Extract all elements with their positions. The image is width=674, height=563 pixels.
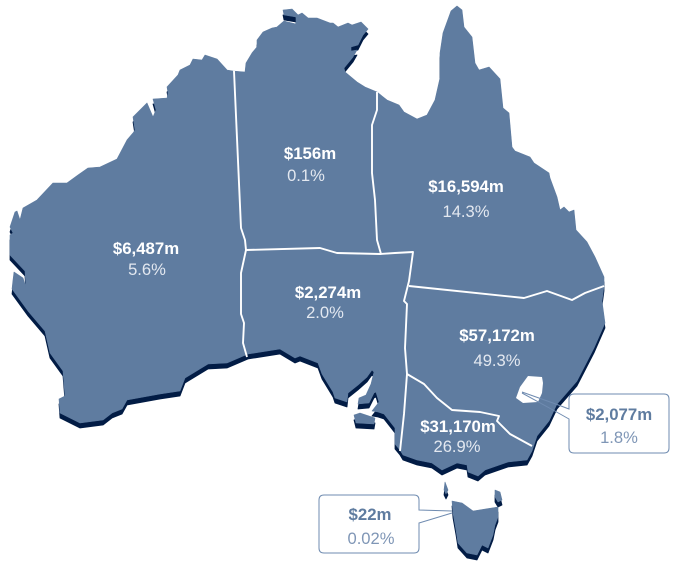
callout: Tasmania: $22m bbox=[349, 505, 391, 524]
Australian Capital Territory bbox=[516, 376, 543, 403]
Kangaroo Island bbox=[354, 413, 375, 424]
label: South Australia: 2.0% bbox=[306, 303, 344, 322]
callout: ACT: 1.8% bbox=[600, 428, 638, 447]
label: Western Australia: $6,487m bbox=[113, 239, 179, 258]
callout: ACT: $2,077m bbox=[586, 405, 652, 424]
label: Victoria: $31,170m bbox=[420, 417, 496, 436]
state borders bbox=[234, 71, 604, 451]
label: Queensland: 14.3% bbox=[442, 202, 490, 221]
label: Northern Territory: $156m bbox=[284, 144, 336, 163]
label: Western Australia: 5.6% bbox=[128, 260, 166, 279]
label: New South Wales: 49.3% bbox=[473, 351, 521, 370]
King Island bbox=[444, 482, 448, 494]
callout: ACT bbox=[522, 392, 669, 453]
Flinders Island bbox=[495, 490, 502, 502]
label: New South Wales bbox=[459, 326, 535, 370]
label: Western Australia bbox=[113, 239, 179, 279]
label: Northern Territory: 0.1% bbox=[287, 166, 325, 185]
Tasmania bbox=[452, 501, 498, 555]
label: South Australia bbox=[295, 283, 361, 322]
callout: Tasmania: 0.02% bbox=[347, 529, 395, 548]
label: Queensland: $16,594m bbox=[428, 177, 504, 196]
label: Victoria: 26.9% bbox=[433, 437, 481, 456]
label: South Australia: $2,274m bbox=[295, 283, 361, 302]
label: Northern Territory bbox=[284, 144, 336, 185]
label: Queensland bbox=[428, 177, 504, 221]
label: Victoria bbox=[420, 417, 496, 456]
label: New South Wales: $57,172m bbox=[459, 326, 535, 345]
callout: Tasmania bbox=[319, 495, 452, 553]
